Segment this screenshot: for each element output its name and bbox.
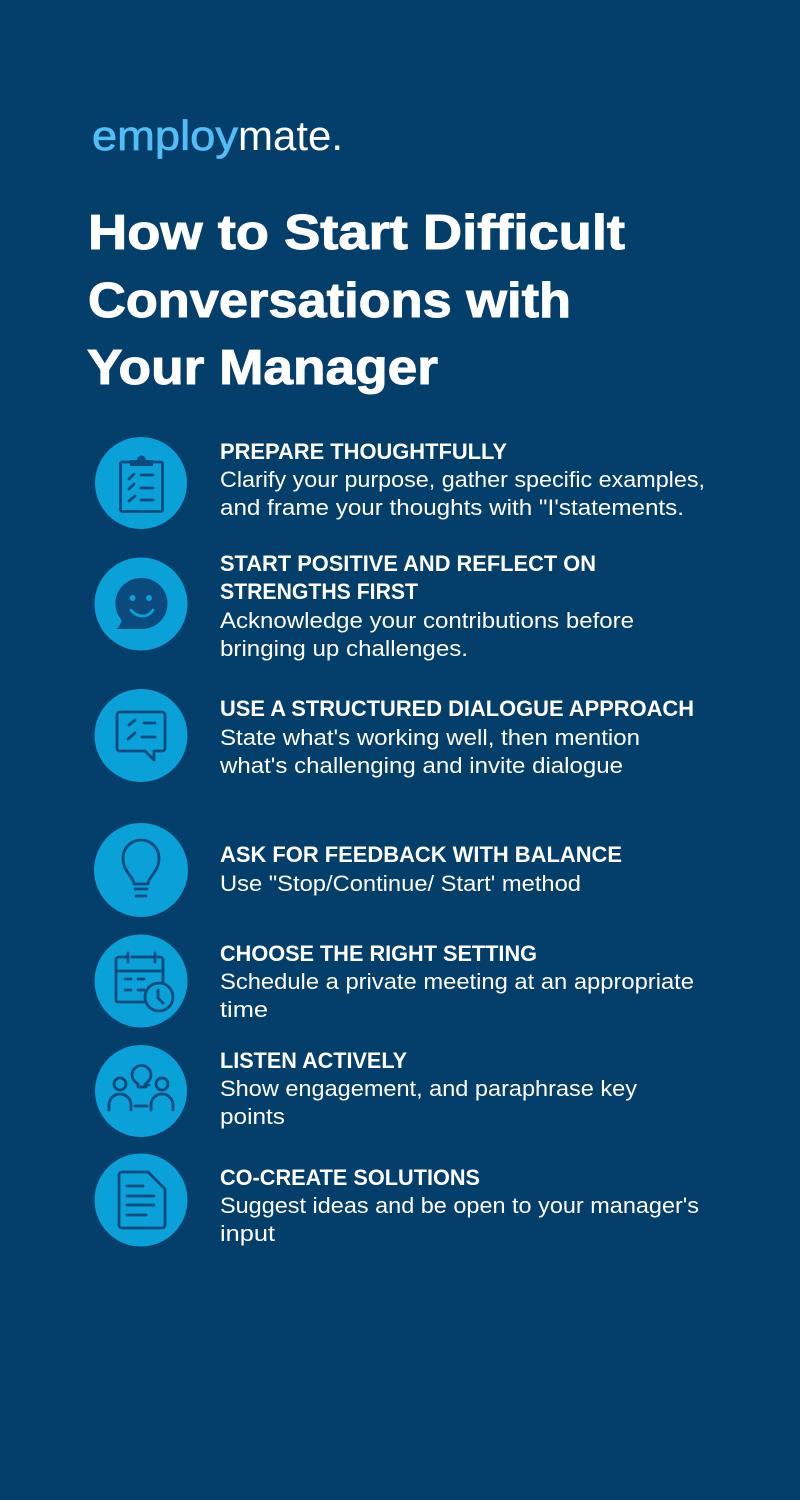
- text: start positive: Acknowledge your contributions before: [220, 608, 634, 633]
- text: co-create solutions: CO-CREATE SOLUTIONS: [220, 1165, 480, 1190]
- step: ask for feedback: [94, 823, 622, 917]
- text: ask for feedback: ASK FOR FEEDBACK WITH BALANCE: [220, 842, 622, 867]
- text: prepare thoughtfully: [220, 439, 705, 520]
- text: choose the right setting: time: [220, 997, 268, 1022]
- icon: clipboard checklist: [95, 437, 187, 529]
- text: start positive: bringing up challenges.: [220, 636, 468, 661]
- text: prepare thoughtfully: and frame your thoughts with "I'statements.: [220, 495, 684, 520]
- text: ask for feedback: [220, 842, 622, 896]
- step: structured dialogue: [94, 689, 694, 782]
- text: prepare thoughtfully: Clarify your purpose, gather specific examples,: [220, 467, 705, 492]
- title: [87, 206, 625, 395]
- text: listen actively: [220, 1048, 637, 1129]
- step: choose the right setting: [94, 934, 694, 1028]
- logo: employmate: employ: [92, 112, 238, 159]
- text: listen actively: points: [220, 1104, 285, 1129]
- step: start positive: [94, 551, 634, 661]
- text: structured dialogue: what's challenging and invite dialogue: [219, 753, 623, 778]
- icon: two people sharing an idea: [95, 1045, 187, 1137]
- title: Conversations with: [88, 274, 571, 328]
- text: structured dialogue: USE A STRUCTURED DIALOGUE APPROACH: [220, 696, 694, 721]
- step: listen actively: [95, 1045, 637, 1137]
- text: start positive: STRENGTHS FIRST: [220, 579, 419, 604]
- text: co-create solutions: Suggest ideas and be open to your manager's: [220, 1193, 699, 1218]
- icon: smiling speech bubble: [94, 558, 188, 650]
- text: choose the right setting: [220, 941, 694, 1022]
- title: How to Start Difficult: [88, 206, 625, 260]
- title: Your Manager: [87, 341, 438, 395]
- text: structured dialogue: [219, 696, 694, 778]
- text: choose the right setting: Schedule a private meeting at an appropriate: [220, 969, 694, 994]
- text: listen actively: LISTEN ACTIVELY: [220, 1048, 407, 1073]
- icon: light bulb: [94, 823, 188, 917]
- text: prepare thoughtfully: PREPARE THOUGHTFULLY: [220, 439, 507, 464]
- step: co-create solutions: [94, 1154, 699, 1246]
- logo: employmate: mate.: [238, 112, 343, 159]
- text: co-create solutions: [220, 1165, 699, 1246]
- icon: calendar with clock: [94, 934, 188, 1028]
- text: co-create solutions: input: [220, 1221, 275, 1246]
- text: choose the right setting: CHOOSE THE RIGHT SETTING: [220, 941, 537, 966]
- text: ask for feedback: Use "Stop/Continue/ Start' method: [220, 871, 581, 896]
- step: prepare thoughtfully: [95, 437, 705, 529]
- text: structured dialogue: State what's working well, then mention: [220, 725, 640, 750]
- icon: chat checklist: [94, 689, 188, 782]
- text: start positive: START POSITIVE AND REFLECT ON: [220, 551, 596, 576]
- icon: document: [94, 1154, 188, 1246]
- text: listen actively: Show engagement, and paraphrase key: [220, 1076, 637, 1101]
- text: start positive: [220, 551, 634, 661]
- logo: employmate: [92, 112, 343, 159]
